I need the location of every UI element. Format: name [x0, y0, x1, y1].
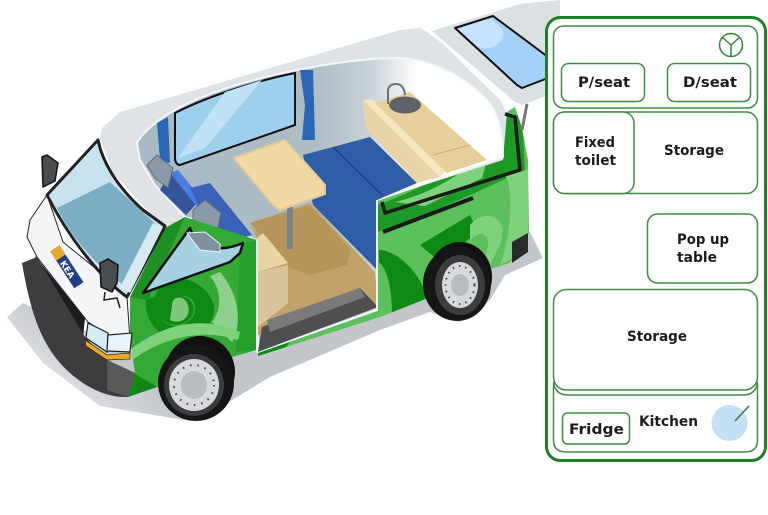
sink — [389, 96, 421, 114]
door edge — [257, 200, 377, 352]
rear storage — [554, 290, 758, 390]
rear wheel — [423, 242, 492, 321]
rear side window frame — [382, 114, 520, 213]
cab section — [554, 26, 758, 108]
van illustration — [7, 0, 560, 421]
storage box — [257, 233, 288, 327]
headlights — [85, 323, 132, 360]
table top — [234, 140, 325, 210]
roof — [100, 28, 507, 227]
fixed toilet: toilet — [575, 153, 616, 169]
window glare — [178, 80, 262, 158]
mirror arm — [104, 292, 120, 308]
fridge — [562, 413, 630, 444]
rear bench seat — [303, 137, 417, 270]
front cowl and hood — [27, 195, 132, 340]
storage and toilet section — [554, 112, 758, 194]
panel outline — [546, 18, 766, 460]
front side window — [143, 228, 243, 293]
fixed toilet: Fixed — [575, 135, 615, 151]
fixed toilet — [554, 112, 634, 194]
passenger seat: P/seat — [578, 75, 630, 91]
icon: sink — [712, 405, 749, 441]
hood badge: KEA — [57, 259, 76, 281]
floor — [250, 203, 378, 335]
seat base — [187, 232, 220, 252]
rear green body — [258, 107, 529, 356]
grille — [35, 256, 85, 337]
tap — [388, 84, 405, 104]
cab interior seen through windshield — [57, 182, 158, 284]
bench seam — [333, 147, 382, 195]
rear bumper — [512, 233, 528, 263]
side window — [175, 73, 295, 165]
front wheel — [158, 336, 235, 421]
kitchen counter — [363, 84, 487, 183]
pop up table — [648, 214, 758, 283]
storage label: Storage — [664, 143, 724, 159]
cutaway interior walls — [137, 58, 503, 352]
step well — [258, 288, 378, 352]
front floor carpet — [160, 170, 252, 245]
kitchen label: Kitchen — [639, 414, 698, 430]
mirrors — [42, 155, 118, 292]
rear storage: Storage — [627, 329, 687, 345]
driver seat: D/seat — [683, 75, 737, 91]
pop up table: table — [677, 250, 717, 266]
layout panel — [546, 18, 766, 460]
hood badge — [49, 245, 83, 289]
driver seat — [668, 64, 750, 102]
bumper — [22, 257, 135, 397]
windshield glare — [120, 223, 163, 293]
rear hatch door — [432, 0, 560, 130]
blue curtains — [157, 70, 315, 163]
pop up table: Pop up — [677, 232, 729, 248]
passenger seat — [562, 64, 644, 102]
table leg — [287, 207, 293, 249]
front seats — [147, 155, 221, 242]
icon: steering wheel — [720, 34, 742, 56]
ground shadow — [7, 232, 543, 421]
body trim strip — [383, 198, 473, 232]
windshield — [47, 140, 165, 297]
fridge: Fridge — [569, 422, 624, 438]
front door green panel — [128, 217, 257, 397]
kitchen section — [554, 382, 758, 452]
